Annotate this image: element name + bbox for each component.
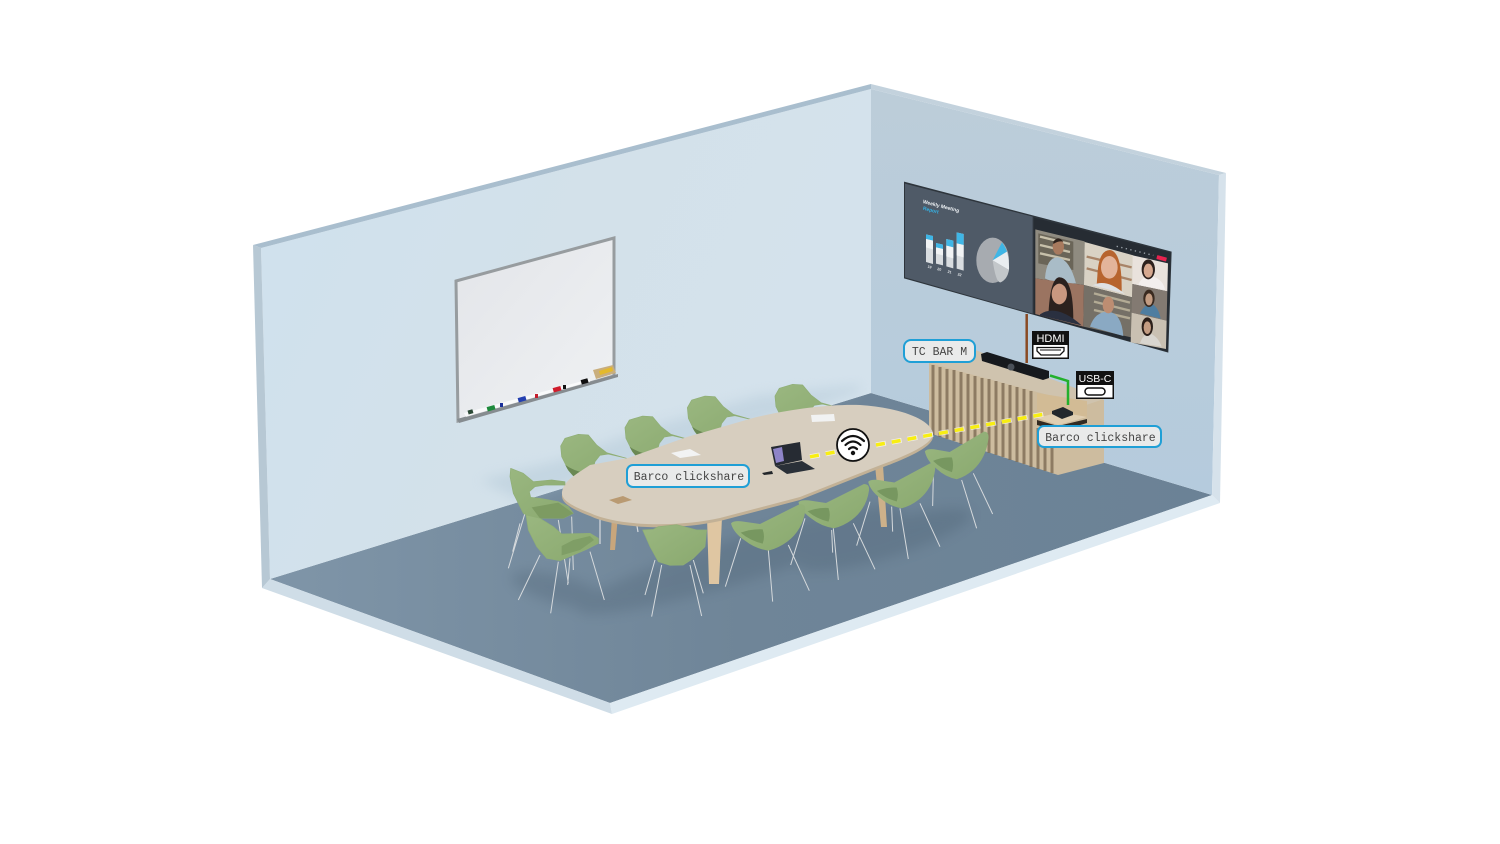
- whiteboard markers: [464, 378, 590, 417]
- label: Barco clickshare table: Barco clickshare: [634, 471, 744, 484]
- whiteboard eraser: [593, 365, 616, 379]
- USB-C badge: USB-C: [1079, 373, 1112, 385]
- front chair 4: [857, 463, 940, 559]
- whiteboard tray: [457, 374, 618, 423]
- bar chart: [926, 232, 964, 277]
- bar chart: 19: [927, 265, 932, 270]
- conference table: [562, 405, 933, 527]
- credenza niche: [1037, 393, 1087, 431]
- video participant tiles: [1035, 229, 1168, 349]
- USB-C badge: [1076, 371, 1114, 399]
- table legs: [600, 465, 887, 584]
- bar chart: 20: [937, 267, 942, 272]
- front chair 3: [791, 484, 875, 580]
- front chair 2: [725, 504, 809, 602]
- icon: wifi: [837, 429, 869, 461]
- clickshare receiver: [1052, 407, 1073, 419]
- display screens: [904, 182, 1172, 353]
- side chair rear: [508, 468, 573, 583]
- bar chart: 21: [947, 270, 952, 275]
- label: Barco clickshare credenza: [1038, 426, 1161, 447]
- label: Barco clickshare table: [627, 465, 749, 487]
- left screen: weekly report: [905, 184, 1033, 314]
- whiteboard: [456, 238, 618, 423]
- report title: Report: [922, 206, 940, 216]
- credenza top: [929, 350, 1104, 405]
- call controls: [1117, 246, 1167, 262]
- bar chart: 22: [957, 272, 962, 277]
- HDMI badge: [1032, 331, 1069, 359]
- side chair front: [518, 515, 604, 613]
- right screen: video call: [1034, 218, 1171, 352]
- label: TC BAR M: TC BAR M: [912, 346, 967, 359]
- dongle: [762, 471, 773, 475]
- front and side chairs: [508, 432, 993, 617]
- HDMI cable: [1025, 314, 1028, 363]
- front chairs right side: [725, 432, 993, 602]
- floor shadows: [508, 489, 976, 631]
- label: Barco clickshare credenza: Barco clickshare: [1045, 432, 1156, 445]
- label: TC BAR M: [904, 340, 975, 362]
- front chair: [643, 525, 707, 617]
- credenza slats: [933, 365, 1052, 473]
- report title: Weekly Meeting: [922, 199, 960, 214]
- pie chart: [976, 238, 1009, 283]
- left wall: [253, 84, 871, 588]
- wall shadows: [480, 385, 860, 500]
- laptop: [771, 442, 815, 474]
- credenza: [929, 350, 1104, 475]
- paper left: [671, 449, 701, 458]
- USB-C cable: [1050, 376, 1068, 405]
- TC BAR M soundbar: [981, 352, 1049, 380]
- notebook: [609, 496, 632, 504]
- paper right: [811, 414, 835, 422]
- right wall: [871, 84, 1226, 503]
- front chair 5: [925, 432, 993, 528]
- floor: [262, 393, 1220, 714]
- back row chairs: [561, 384, 841, 479]
- HDMI badge: HDMI: [1036, 333, 1065, 345]
- wireless link dashed line: [810, 414, 1045, 457]
